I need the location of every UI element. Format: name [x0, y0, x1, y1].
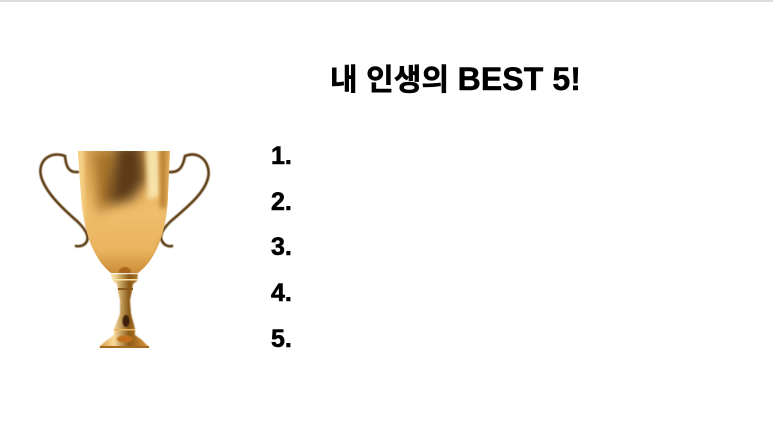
item 1: 1. [271, 142, 292, 170]
item 5: 5. [271, 325, 292, 353]
item 3: 3. [271, 233, 292, 261]
item 4: 4. [271, 279, 292, 307]
stem and base [99, 274, 149, 347]
icon: golden trophy [38, 151, 211, 348]
item 2: 2. [271, 188, 292, 216]
right handle [161, 154, 209, 246]
stem highlights [113, 279, 137, 280]
title: 내 인생의 BEST 5! [330, 61, 581, 97]
left handle [40, 154, 88, 246]
numbered list [271, 142, 292, 353]
cup bowl [78, 151, 170, 273]
